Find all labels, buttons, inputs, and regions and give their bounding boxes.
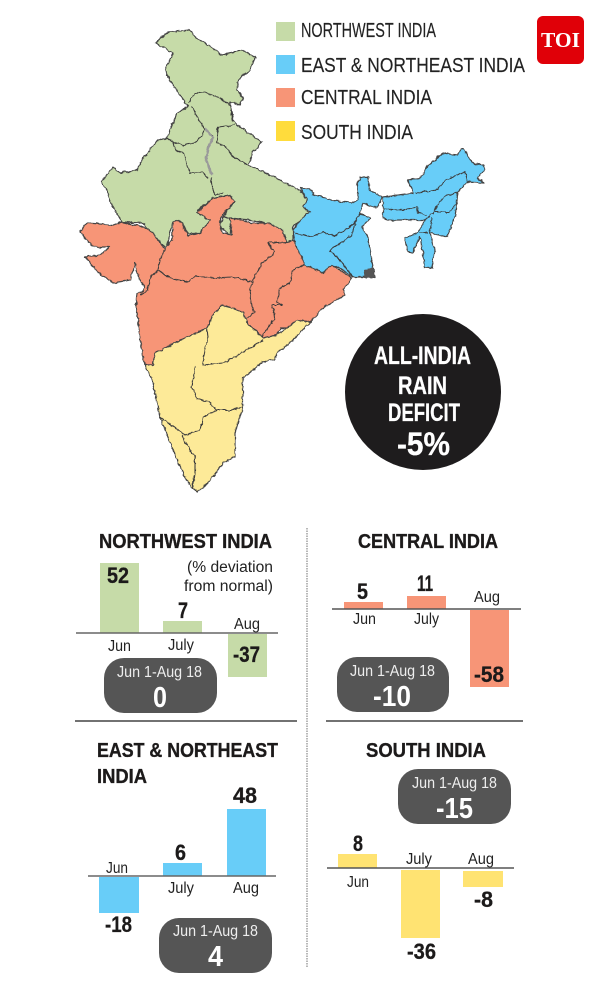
bar chart: Central India: July (414, 611, 439, 628)
heading: East and Northeast India (97, 740, 278, 788)
region: Central India (80, 195, 352, 365)
bar chart: Central India: Jun (353, 611, 376, 628)
heading: East and Northeast India: INDIA (97, 766, 147, 788)
total pill: East and Northeast India: 4 (208, 941, 223, 973)
callout: all-India rain deficit: RAIN (398, 372, 447, 400)
bar chart: South India: 8 (353, 831, 363, 856)
callout: all-India rain deficit: DEFICIT (388, 399, 460, 427)
total pill: Northwest India: Jun 1-Aug 18 (117, 664, 202, 681)
bar chart: South India: Aug (468, 851, 494, 868)
bar chart: East and Northeast India: 48 (233, 783, 257, 808)
panel: Northwest India (76, 531, 278, 714)
total pill: South India: Jun 1-Aug 18 (412, 775, 497, 792)
bar chart: Central India: 11 (417, 571, 433, 596)
bar chart: Northwest India: Jun (108, 638, 131, 655)
total pill: Central India: -10 (373, 681, 411, 713)
callout: all-India rain deficit: -5% (397, 426, 450, 462)
bar chart: South India: Jun (347, 874, 369, 891)
callout: all-India rain deficit: ALL-INDIA (374, 342, 471, 370)
panel: Central India (332, 531, 521, 713)
legend item: South India: SOUTH INDIA (301, 122, 414, 144)
bar chart: East and Northeast India (88, 783, 276, 937)
bar chart: Central India (332, 571, 521, 687)
callout: all-India rain deficit (345, 314, 501, 470)
heading: Central India: CENTRAL INDIA (358, 531, 498, 553)
total pill: South India: -15 (436, 793, 473, 825)
map of India (80, 30, 485, 492)
region: South India (145, 305, 311, 492)
panel: South India (327, 740, 514, 964)
total pill: Northwest India (104, 658, 217, 714)
note: percent deviation from normal: (% deviation (187, 559, 273, 576)
panel: East and Northeast India (88, 740, 278, 973)
legend item: Northwest India (276, 20, 436, 42)
total pill: Central India: Jun 1-Aug 18 (350, 663, 435, 680)
bar chart: Central India: -58 (474, 662, 504, 687)
bar chart: South India (327, 831, 514, 964)
heading: East and Northeast India: EAST & NORTHEAST (97, 740, 278, 762)
bar chart: Northwest India: Aug (234, 616, 260, 633)
bar chart: Northwest India (76, 563, 278, 677)
bar chart: Northwest India: -37 (233, 642, 260, 667)
bar chart: East and Northeast India: 6 (175, 840, 186, 865)
total pill: Northwest India: 0 (153, 682, 167, 714)
TOI logo: TOI (541, 28, 580, 52)
legend item: Central India: CENTRAL INDIA (301, 87, 433, 109)
bar chart: East and Northeast India: Aug (233, 880, 259, 897)
bar chart: South India: -8 (474, 887, 493, 912)
bar chart: East and Northeast India: -18 (105, 912, 132, 937)
bar chart: East and Northeast India: July (168, 880, 194, 897)
legend (276, 20, 526, 144)
bar chart: Central India: Aug (474, 589, 500, 606)
bar chart: Northwest India: 52 (107, 563, 129, 588)
legend item: East and Northeast India: EAST & NORTHEAST INDIA (301, 55, 526, 77)
note: percent deviation from normal: from normal) (184, 578, 273, 595)
bar chart: East and Northeast India: Jun (106, 860, 128, 877)
heading: Northwest India: NORTHWEST INDIA (99, 531, 272, 553)
legend item: Northwest India: NORTHWEST INDIA (301, 20, 436, 42)
bar chart: Northwest India: 7 (178, 598, 188, 623)
bar chart: Northwest India: July (168, 637, 194, 654)
total pill: East and Northeast India: Jun 1-Aug 18 (173, 923, 258, 940)
region: Northeast India (383, 148, 485, 268)
TOI logo (537, 16, 584, 64)
total pill: East and Northeast India (159, 918, 272, 973)
total pill: Central India (337, 657, 449, 713)
bar chart: South India: July (406, 851, 432, 868)
heading: South India: SOUTH INDIA (366, 740, 486, 762)
region: Northwest India (101, 30, 310, 248)
note: percent deviation from normal (184, 559, 273, 595)
bar chart: South India: -36 (407, 939, 436, 964)
region: East India (293, 177, 382, 278)
total pill: South India (398, 769, 511, 825)
bar chart: Central India: 5 (357, 579, 368, 604)
